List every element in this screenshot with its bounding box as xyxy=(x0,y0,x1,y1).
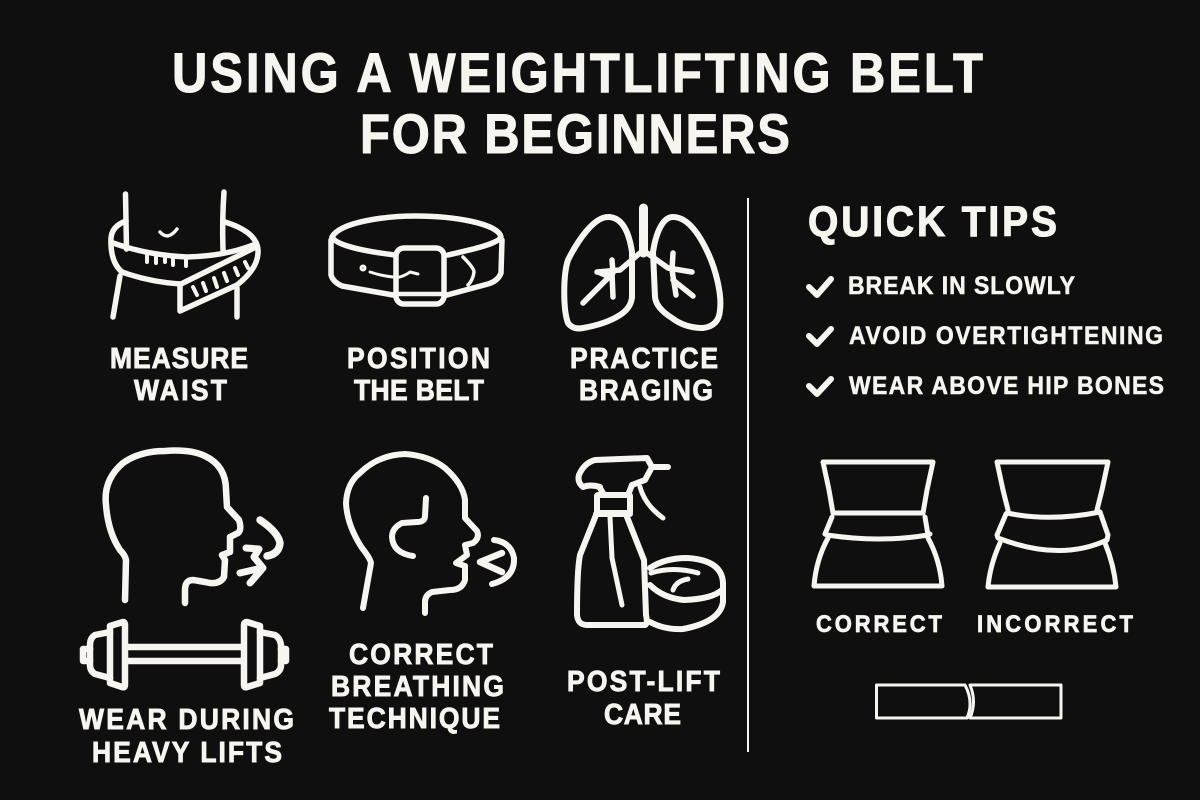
label: wear during heavy lifts: HEAVY LIFTS xyxy=(92,736,282,768)
label: wear during heavy lifts: WEAR DURING xyxy=(79,703,294,735)
title xyxy=(172,43,983,166)
diagram: incorrect belt position xyxy=(988,462,1116,587)
icon: belt strap xyxy=(876,685,1061,718)
label: practice braging: PRACTICE xyxy=(570,342,718,374)
label: post-lift care: POST-LIFT xyxy=(567,665,720,697)
icon: belt xyxy=(331,216,502,304)
tip: avoid overtightening: AVOID OVERTIGHTENING xyxy=(849,322,1163,350)
label: correct: CORRECT xyxy=(816,610,942,637)
label: practice braging xyxy=(570,342,718,406)
tip: wear above hip bones: WEAR ABOVE HIP BONES xyxy=(849,372,1164,400)
panel: quick tips xyxy=(808,197,1164,718)
label: measure waist: WAIST xyxy=(134,374,227,406)
heading: quick tips: QUICK TIPS xyxy=(808,197,1057,245)
title: FOR BEGINNERS xyxy=(360,104,790,166)
label: correct breathing technique: BREATHING xyxy=(331,670,504,702)
icon: measure waist xyxy=(111,192,258,317)
label: measure waist xyxy=(110,342,248,406)
label: post-lift care: CARE xyxy=(604,698,681,730)
label: wear during heavy lifts xyxy=(79,703,294,768)
label: position the belt: THE BELT xyxy=(354,374,484,406)
label: correct breathing technique xyxy=(329,638,504,734)
label: position the belt xyxy=(347,342,490,406)
diagram: correct belt position xyxy=(814,462,942,586)
label: measure waist: MEASURE xyxy=(110,342,248,374)
tip: break in slowly: BREAK IN SLOWLY xyxy=(848,272,1075,300)
icon: barbell xyxy=(83,622,286,687)
label: correct breathing technique: CORRECT xyxy=(349,638,493,670)
title: USING A WEIGHTLIFTING BELT xyxy=(172,43,983,105)
label: incorrect: INCORRECT xyxy=(977,610,1133,637)
icon: head breathing xyxy=(346,454,514,613)
label: practice braging: BRAGING xyxy=(579,374,713,406)
icon: head exhaling xyxy=(106,451,280,603)
label: position the belt: POSITION xyxy=(347,342,490,374)
icon: spray bottle and tin xyxy=(577,458,723,629)
label: post-lift care xyxy=(567,665,720,730)
label: correct breathing technique: TECHNIQUE xyxy=(329,702,500,734)
panel: steps xyxy=(79,192,723,768)
icon: lungs xyxy=(564,208,720,328)
